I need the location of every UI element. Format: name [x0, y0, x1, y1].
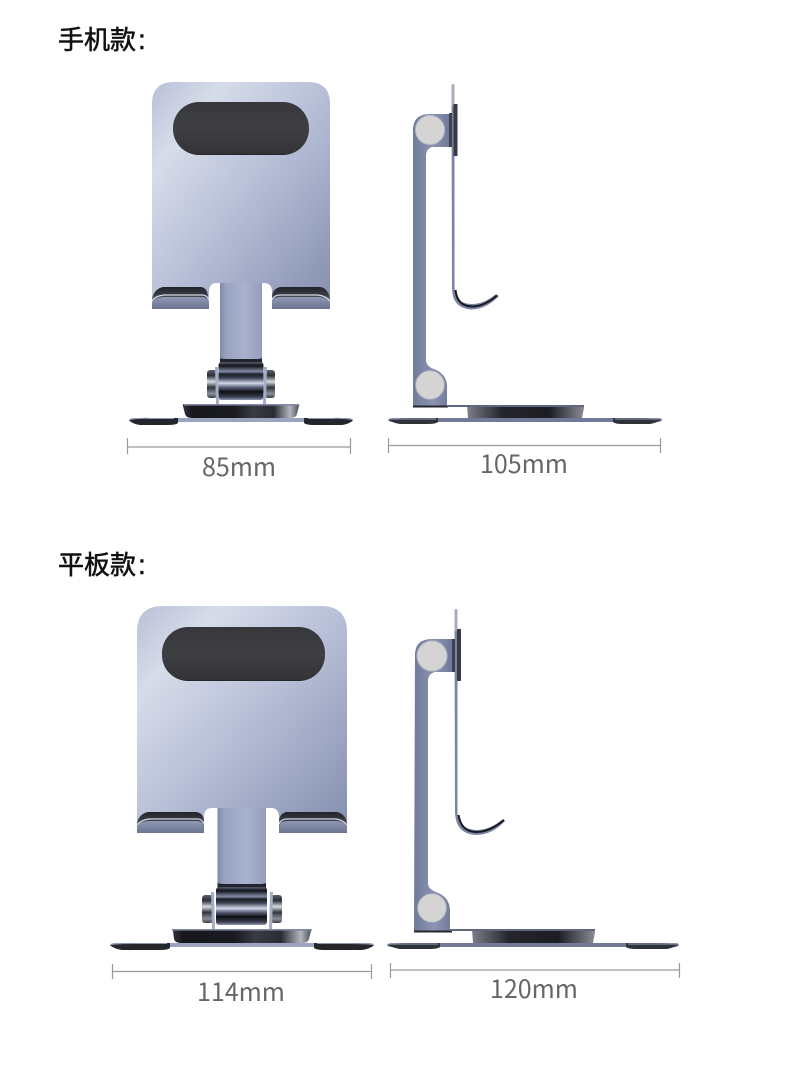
rotating disk	[183, 404, 299, 418]
title: tablet model: 平板款:	[58, 549, 146, 580]
hinge	[202, 883, 282, 929]
phone stand side view	[388, 84, 662, 424]
dimension: 120mm	[390, 963, 680, 1006]
rotating disk	[447, 405, 584, 418]
plate top highlight	[454, 609, 458, 631]
right phone rest	[272, 287, 330, 309]
dimension: 105mm	[388, 438, 660, 481]
dimension: 85mm: 85mm	[202, 448, 276, 484]
dimension: 120mm: 120mm	[490, 970, 578, 1006]
right tablet rest	[279, 812, 347, 833]
phone stand front view	[129, 82, 353, 425]
dimension: 85mm	[128, 438, 350, 484]
tablet stand side view	[387, 609, 679, 949]
back plate	[137, 606, 347, 833]
dimension: 105mm: 105mm	[480, 445, 568, 481]
base	[110, 943, 374, 950]
hook inner shadow	[456, 290, 497, 306]
rear pad	[457, 629, 461, 681]
title: phone model: 手机款:	[58, 24, 146, 55]
plate edge	[452, 84, 499, 310]
plate edge	[454, 610, 505, 835]
arm	[220, 283, 262, 359]
arm with joints	[413, 114, 452, 407]
base	[387, 943, 679, 949]
plate top highlight	[452, 84, 454, 106]
top joint cap	[416, 116, 444, 144]
rear pad	[454, 104, 458, 156]
arm	[218, 808, 266, 884]
base	[388, 418, 662, 424]
dimension: 114mm: 114mm	[197, 973, 285, 1009]
left tablet rest	[137, 812, 204, 833]
back plate	[152, 82, 330, 309]
hinge	[207, 358, 275, 404]
rotating disk	[172, 929, 312, 943]
rubber pad	[162, 627, 325, 681]
bottom joint cap	[416, 370, 444, 400]
bottom joint cap	[418, 894, 446, 922]
dimension: 114mm	[112, 964, 372, 1009]
tablet stand front view	[110, 606, 374, 950]
hook inner shadow	[458, 815, 504, 832]
left phone rest	[152, 287, 209, 309]
top joint cap	[417, 641, 447, 671]
base	[129, 418, 353, 425]
rotating disk	[450, 929, 595, 943]
rubber pad	[173, 102, 309, 155]
arm with joints	[414, 639, 455, 932]
